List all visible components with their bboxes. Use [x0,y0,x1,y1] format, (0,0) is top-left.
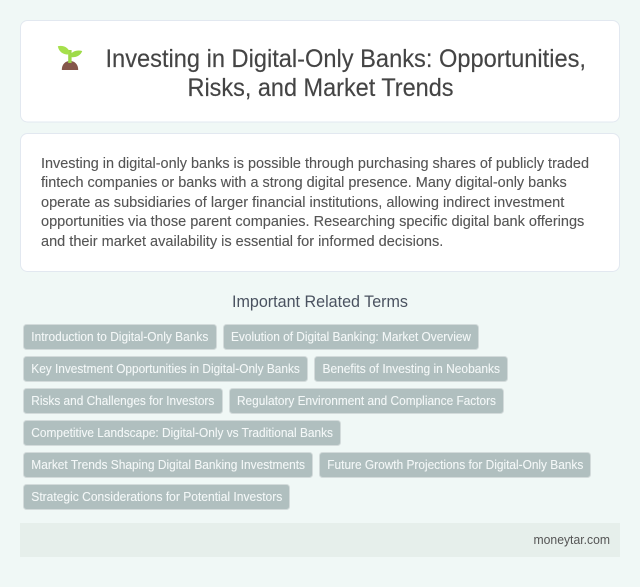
tag: future growth: Future Growth Projections for Digital-Only Banks [327,458,583,472]
panel: title card [20,20,620,122]
panel: description card [20,134,620,272]
tag: strategic considerations: Strategic Considerations for Potential Investors [31,490,282,504]
title [106,45,586,102]
tag: competitive landscape: Competitive Landscape: Digital-Only vs Traditional Banks [31,426,333,440]
description text: operate as subsidiaries of larger financial institutions, allowing indirect investment [41,195,564,211]
tag: risks [24,388,222,414]
tag: introduction: Introduction to Digital-Only Banks [31,330,208,344]
footer: moneytar.com [534,533,610,547]
tag: regulatory: Regulatory Environment and Compliance Factors [237,394,496,408]
tag: market trends [24,452,312,478]
description text: opportunities via those parent companies. Researching specific digital bank offerings [41,214,584,230]
heading: important related terms: Important Related Terms [232,293,408,311]
title: Investing in Digital-Only Banks: Opportunities, [106,45,586,73]
tag: risks: Risks and Challenges for Investors [31,394,214,408]
description text [41,156,589,250]
description text: fintech companies or banks with a strong digital presence. Many digital-only banks [41,175,567,191]
tag: benefits: Benefits of Investing in Neobanks [322,362,500,376]
title: Risks, and Market Trends [188,74,454,102]
tag: benefits [314,356,508,382]
panel: related term tags [24,324,590,510]
tag: competitive landscape [24,420,340,446]
tag: strategic considerations [24,484,290,510]
tag: regulatory [230,388,504,414]
tag: evolution: Evolution of Digital Banking: Market Overview [231,330,472,344]
tag: opportunities [24,356,308,382]
tag: future growth [320,452,590,478]
tag: opportunities: Key Investment Opportunities in Digital-Only Banks [31,362,300,376]
tag: introduction [24,324,216,350]
description text: and their market availability is essential for informed decisions. [41,234,443,250]
icon: seedling [58,46,82,70]
tag: market trends: Market Trends Shaping Digital Banking Investments [31,458,305,472]
description text: Investing in digital-only banks is possible through purchasing shares of publicly traded [41,156,589,172]
tag: evolution [224,324,478,350]
footer [20,523,620,557]
